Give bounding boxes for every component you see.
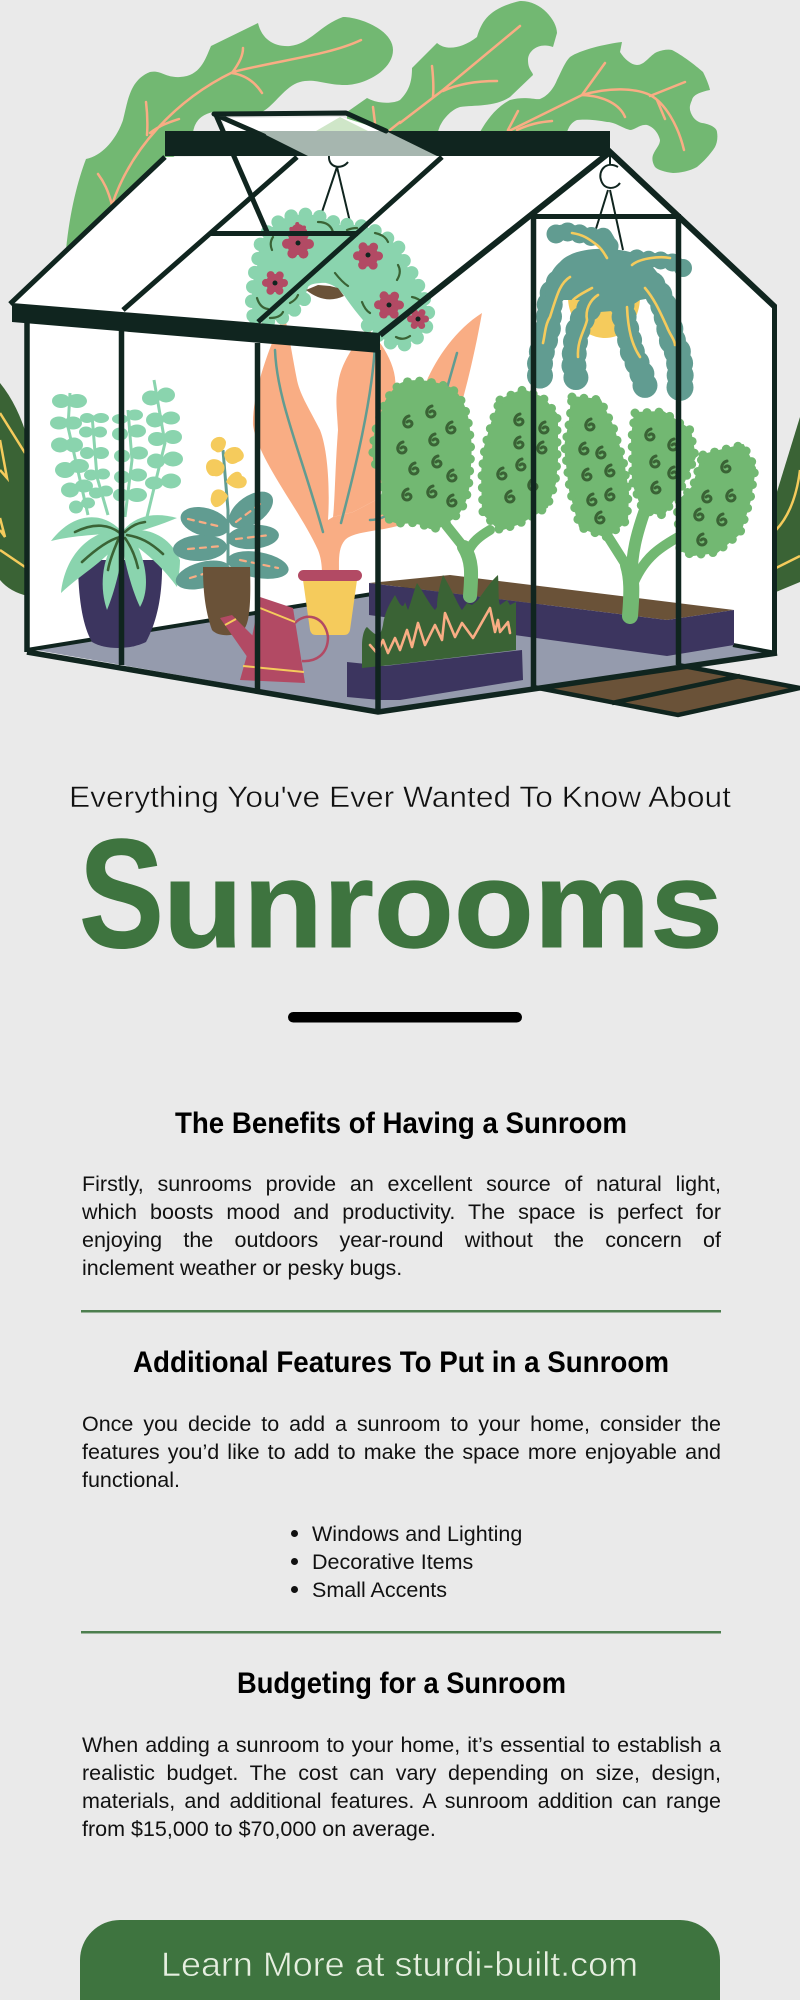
text block: benefits: Firstly, sunrooms provide an excellent source of natural light, (82, 1172, 721, 1196)
greenhouse floor (30, 583, 775, 710)
divider bar (288, 1012, 522, 1022)
icon: top leaf right (480, 42, 717, 173)
hanging flower basket (252, 214, 429, 346)
bullet list: Small Accents (312, 1578, 447, 1602)
icon: tree left (373, 381, 557, 596)
brown pot (203, 567, 250, 635)
roof vent window (214, 113, 437, 156)
text block: features: functional. (82, 1468, 180, 1492)
bullet list: Windows and Lighting (312, 1522, 522, 1546)
front grass planter (347, 575, 523, 700)
heading: budgeting: Budgeting for a Sunroom (237, 1667, 566, 1700)
icon: right side leaf (776, 417, 800, 592)
icon: top leaf left (66, 17, 393, 250)
greenhouse frame (10, 113, 777, 712)
purple pot (78, 560, 162, 648)
spiky mint plant (51, 515, 180, 610)
text block: benefits (82, 1172, 721, 1280)
floor back edge (27, 583, 776, 653)
watering can (220, 597, 328, 683)
text block: features: Once you decide to add a sunroom to your home, consider the (82, 1412, 721, 1436)
hanging teal plant (540, 232, 683, 388)
text block: benefits: inclement weather or pesky bugs. (82, 1256, 402, 1280)
call to action button (80, 1920, 720, 2000)
heading: additional features: Additional Features To Put in a Sunroom (133, 1346, 669, 1379)
salmon plant (253, 313, 482, 575)
hanging hook right (595, 152, 623, 250)
bullet list: Decorative Items (312, 1550, 473, 1574)
yellow flowering plant (172, 437, 291, 595)
text block: budget: from $15,000 to $70,000 on average. (82, 1816, 436, 1840)
text block: benefits: enjoying the outdoors year-round without the concern of (82, 1228, 721, 1252)
yellow pot for salmon plant (298, 570, 362, 635)
back planter box (369, 575, 734, 656)
call to action text: Learn More at sturdi-built.com (161, 1946, 638, 1984)
heading: benefits: The Benefits of Having a Sunroom (175, 1107, 627, 1140)
subtitle: Everything You've Ever Wanted To Know About (69, 781, 732, 814)
text block: features: features you’d like to add to make the space more enjoyable and (82, 1440, 721, 1464)
text block: budget: When adding a sunroom to your home, it’s essential to establish a (82, 1732, 721, 1756)
icon: crimson flowers (266, 224, 426, 326)
door mat (533, 665, 800, 715)
icon: top leaf middle (347, 1, 557, 132)
illustration: greenhouse (0, 1, 800, 715)
divider rule two (81, 1631, 721, 1634)
ridge beam (165, 131, 610, 156)
text block: features (82, 1412, 721, 1492)
divider rule one (81, 1310, 721, 1312)
greenhouse glass body (12, 152, 776, 712)
text block: budget (82, 1732, 721, 1840)
text block: benefits: which boosts mood and productivity. The space is perfect for (82, 1200, 721, 1224)
text block: budget: materials, and additional features. A sunroom addition can range (82, 1788, 721, 1812)
text block: budget: realistic budget. The cost can vary depending on size, design, (82, 1760, 721, 1784)
icon: left side leaf (0, 383, 28, 596)
eucalyptus plant (50, 380, 183, 517)
bullet list (291, 1522, 522, 1602)
hanging hook left (321, 156, 350, 222)
title: S (79, 807, 164, 980)
title: unrooms (163, 837, 723, 974)
icon: tree right (565, 397, 755, 616)
